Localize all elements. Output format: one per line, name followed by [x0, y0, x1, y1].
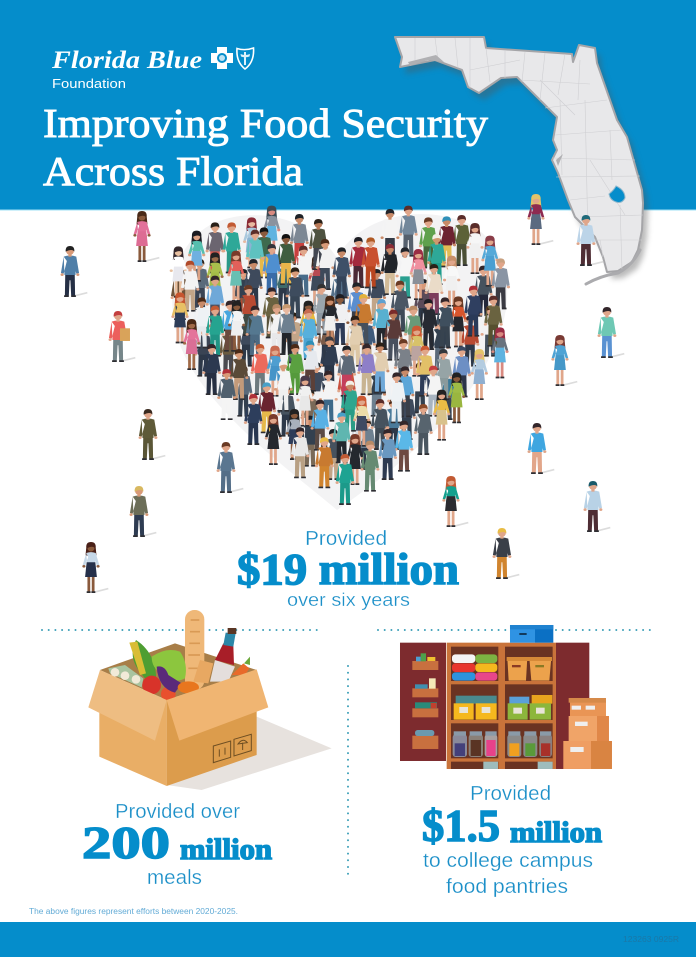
blue box on top: [510, 625, 553, 643]
food: corn and greens: [133, 640, 156, 680]
logo: Florida Blue Foundation: Florida Blue: [51, 47, 202, 74]
header band: [0, 0, 696, 210]
handling icons: [213, 734, 251, 763]
food: eggs: [108, 665, 143, 687]
title: Improving Food Security: [43, 100, 489, 146]
stat: 200 million meals: Provided over: [115, 801, 240, 823]
person: delivery with parcel: [109, 311, 130, 362]
person: light blue shirt: [577, 215, 595, 266]
heart shape backdrop: [172, 214, 507, 510]
stat: $1.5 million: food pantries: [446, 876, 568, 898]
icon: shield: [237, 48, 254, 69]
green bins: [508, 695, 552, 720]
food: wine bottle: [210, 628, 236, 682]
person: pink scrubs: [133, 211, 151, 262]
person: teal shirt: [598, 307, 616, 358]
person: blue shirt: [528, 423, 546, 474]
yellow bins: [454, 696, 497, 720]
stat: $1.5 million: Provided: [470, 783, 551, 805]
food: tomato, eggplant, pepper: [142, 666, 199, 701]
bottom containers: [483, 762, 553, 769]
food: lettuce: [152, 650, 186, 681]
cabinet frame: [447, 643, 556, 769]
dotted dividers: [42, 630, 656, 876]
person: maroon top: [527, 194, 545, 245]
person: farmer: [130, 486, 148, 537]
title: Across Florida: [43, 148, 303, 194]
florida keys: [586, 250, 640, 284]
box right face: [167, 672, 257, 786]
door shelves: [412, 653, 438, 749]
cabinet doors: [400, 643, 589, 769]
person: nurse: [61, 246, 79, 297]
stat: $1.5 million: $1.5: [422, 800, 500, 851]
footnote: The above figures represent efforts between 2020-2025.: [29, 907, 238, 916]
jars: [453, 731, 552, 757]
box shadow: [167, 717, 332, 790]
job code: 123263 0925R: [623, 935, 679, 944]
stat: $19 million: over six years: [287, 590, 410, 610]
illustration: food box: [88, 610, 332, 790]
person: slate suit: [217, 442, 235, 493]
lake Okeechobee: [609, 186, 625, 202]
box left face: [99, 673, 167, 786]
stat: $1.5 million: [422, 783, 602, 898]
food: carrot: [232, 663, 249, 675]
box flaps: [88, 669, 268, 741]
box interior: [100, 643, 257, 700]
person: blue dress: [551, 335, 569, 386]
stat: 200 million meals: 200: [82, 817, 170, 868]
stat: $19 million: Provided: [305, 528, 387, 550]
stat: $1.5 million: to college campus: [423, 850, 593, 872]
logo: Florida Blue Foundation: Foundation: [52, 76, 126, 91]
food: bread: [185, 610, 213, 690]
person: olive suit: [139, 409, 157, 460]
title: [43, 100, 489, 194]
footer band: [0, 922, 696, 957]
person: hard hat: [493, 528, 511, 579]
icon: cross: [211, 47, 233, 69]
towels: [452, 654, 497, 681]
person: teal top: [442, 476, 460, 527]
stat: 200 million meals: [82, 801, 272, 889]
person: office worker: [82, 542, 100, 593]
stacked cardboard boxes: [563, 698, 612, 769]
stat: 200 million meals: million: [180, 833, 272, 866]
crowd of people forming a heart: [170, 206, 510, 505]
person: pale shirt: [584, 481, 602, 532]
map of Florida: [395, 37, 648, 284]
stat: $19 million: [237, 528, 459, 610]
scattered people around the heart: [61, 194, 624, 593]
orange bins: [507, 657, 552, 681]
stat: 200 million meals: meals: [147, 867, 202, 889]
illustration: pantry cabinet: [400, 625, 612, 769]
shelf interiors: [451, 647, 553, 769]
stat: $1.5 million: million: [510, 816, 602, 849]
logo: Florida Blue Foundation: [51, 47, 254, 91]
stat: $19 million: $19 million: [237, 545, 459, 594]
